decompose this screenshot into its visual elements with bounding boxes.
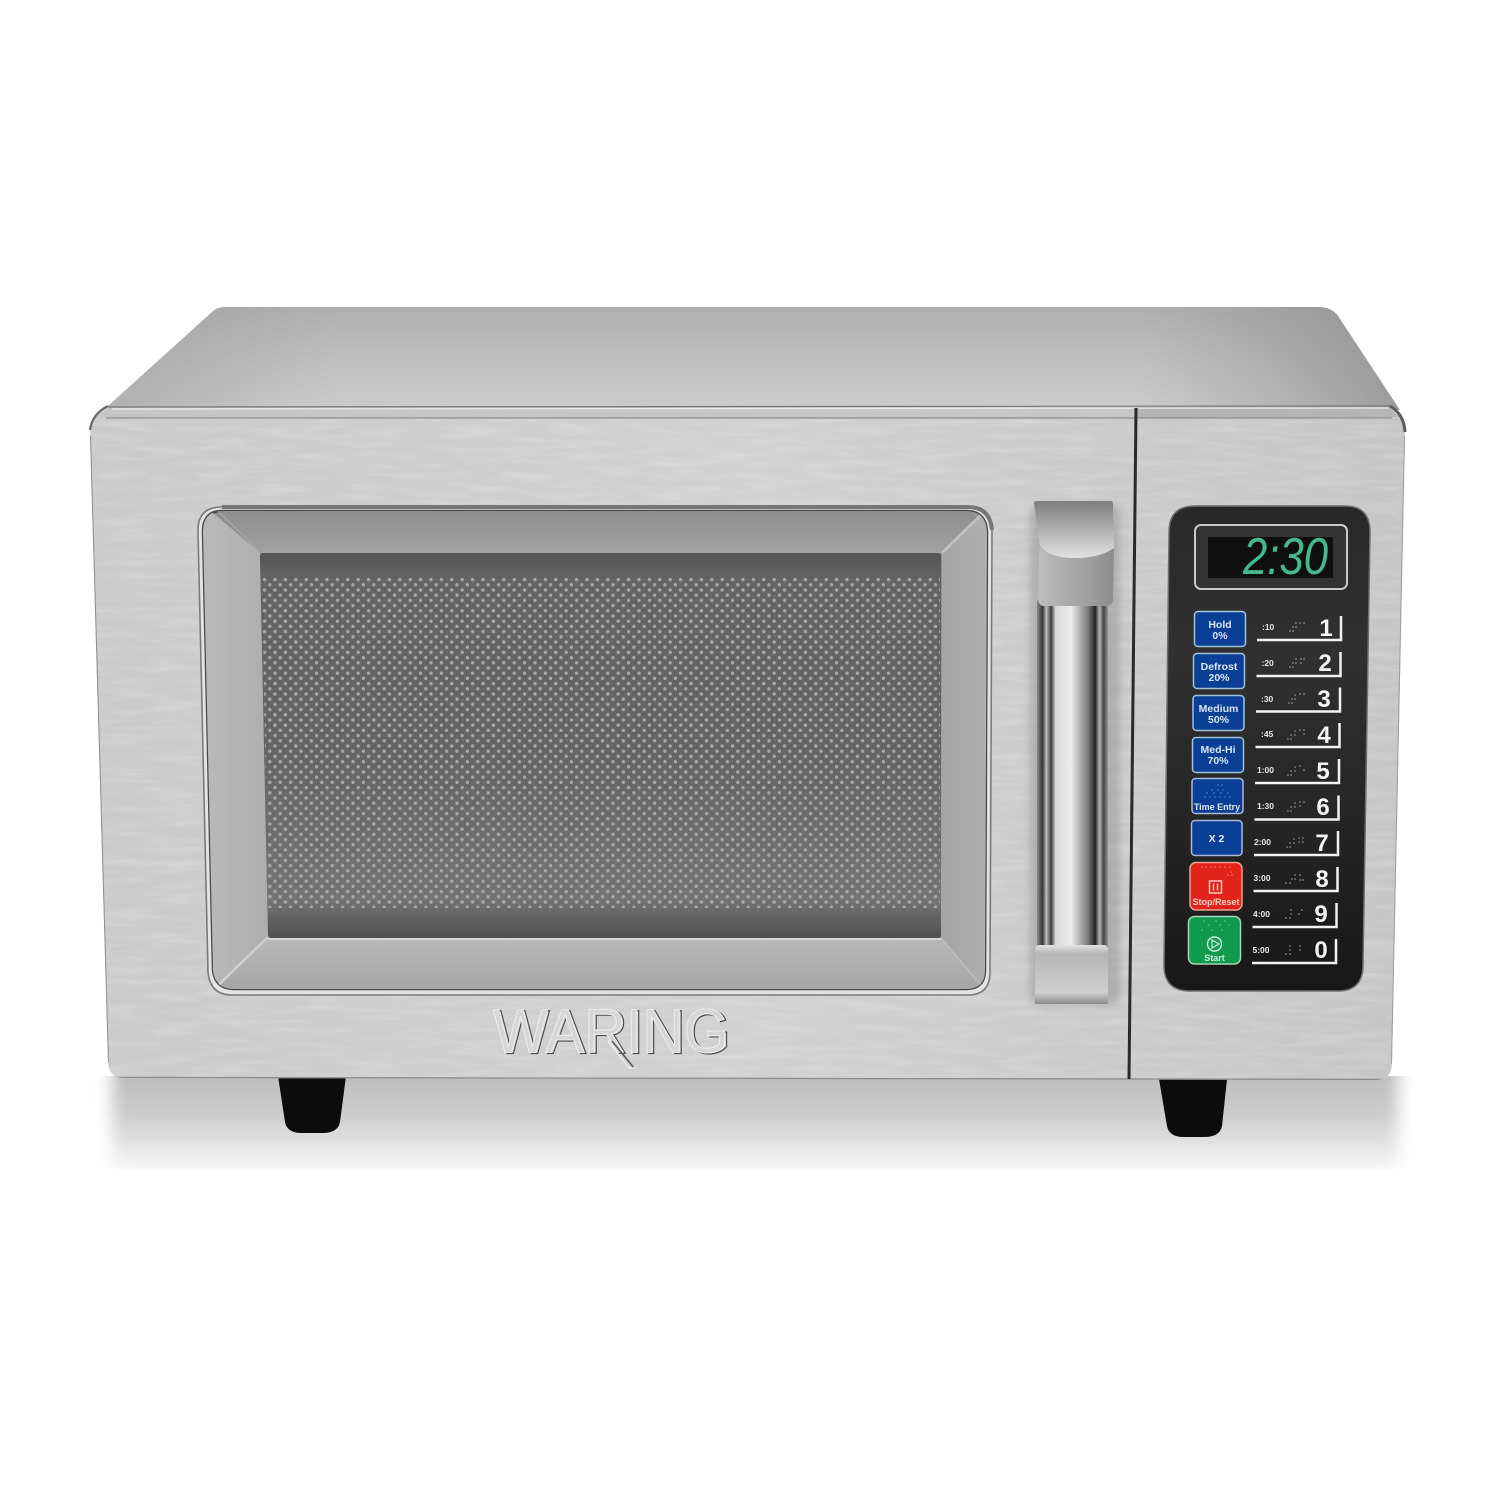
control panel [1164,506,1370,991]
keypad row 9: 9 [1314,901,1328,928]
keypad row 8: 8 [1315,866,1329,893]
button: Time Entry [1192,778,1243,814]
door handle [1030,501,1120,1005]
keypad row 7: 2:00 [1254,837,1271,847]
keypad row 1 [1257,615,1341,642]
door window [198,500,992,998]
front face of the cabinet [85,405,1410,1085]
floor shadow [112,1076,1398,1170]
keypad row 6: 6 [1316,794,1330,821]
button: Medium [1193,696,1244,730]
button: Hold: 0% [1212,630,1228,642]
digital display [1195,525,1347,589]
handle top cap [1034,501,1114,558]
keypad row 7: 7 [1315,830,1329,857]
button: Defrost [1194,654,1244,688]
handle bottom collar [1035,945,1108,1004]
perforated mesh window [260,553,941,939]
keypad row 4: 4 [1317,722,1331,749]
top lid of the cabinet [104,307,1400,410]
button: Hold: Hold [1208,619,1232,631]
button: Start [1188,916,1240,964]
button: Med-Hi: Med-Hi [1200,744,1236,756]
keypad row 2: :20 [1262,658,1274,668]
keypad row 4: :45 [1261,729,1274,739]
keypad row 2 [1256,650,1340,677]
keypad row 2: 2 [1318,650,1332,677]
button: Defrost: 20% [1208,672,1230,684]
door seam [1129,408,1136,1079]
keypad row 6 [1254,794,1338,821]
brand logo: WARING [495,998,731,1068]
right foot [1159,1079,1227,1137]
handle upper collar [1038,548,1114,606]
product image: microwave oven [88,307,1406,1168]
button: Time Entry: Time Entry [1194,802,1240,812]
button: Medium: 50% [1208,714,1230,726]
keypad row 3: 3 [1317,686,1331,713]
button: Start: Start [1204,953,1225,963]
keypad row 0: 5:00 [1252,945,1270,955]
button: X 2 [1192,820,1242,856]
keypad row 0: 0 [1314,937,1328,964]
keypad row 5: 5 [1316,758,1330,785]
button: Med-Hi [1192,738,1244,772]
button: X 2: X 2 [1209,833,1225,845]
keypad row 9 [1252,901,1336,928]
keypad row 5 [1255,758,1339,785]
button: Med-Hi: 70% [1207,755,1229,767]
keypad row 1: :10 [1262,622,1275,632]
keypad row 7 [1254,830,1338,857]
top ridge of the door and control panel [90,406,1405,432]
handle bar [1037,600,1108,950]
keypad row 8 [1254,866,1338,893]
keypad row 5: 1:00 [1257,765,1274,775]
button: Medium: Medium [1199,703,1238,715]
keypad row 0 [1252,937,1336,964]
keypad row 9: 4:00 [1253,909,1270,919]
button: Hold [1194,612,1246,646]
button: Stop/Reset [1190,862,1242,910]
digital display: 2:30 [1242,528,1328,586]
button: Defrost: Defrost [1201,661,1238,673]
window frame bevel [198,500,992,998]
keypad row 1: 1 [1319,615,1333,642]
brand logo: WARING [493,998,729,1066]
keypad row 4 [1256,722,1340,749]
keypad row 3 [1256,686,1340,713]
keypad row 3: :30 [1261,694,1274,704]
keypad row 8: 3:00 [1254,873,1271,883]
button: Stop/Reset: Stop/Reset [1192,897,1240,907]
keypad row 6: 1:30 [1257,801,1274,811]
left foot [278,1076,346,1133]
